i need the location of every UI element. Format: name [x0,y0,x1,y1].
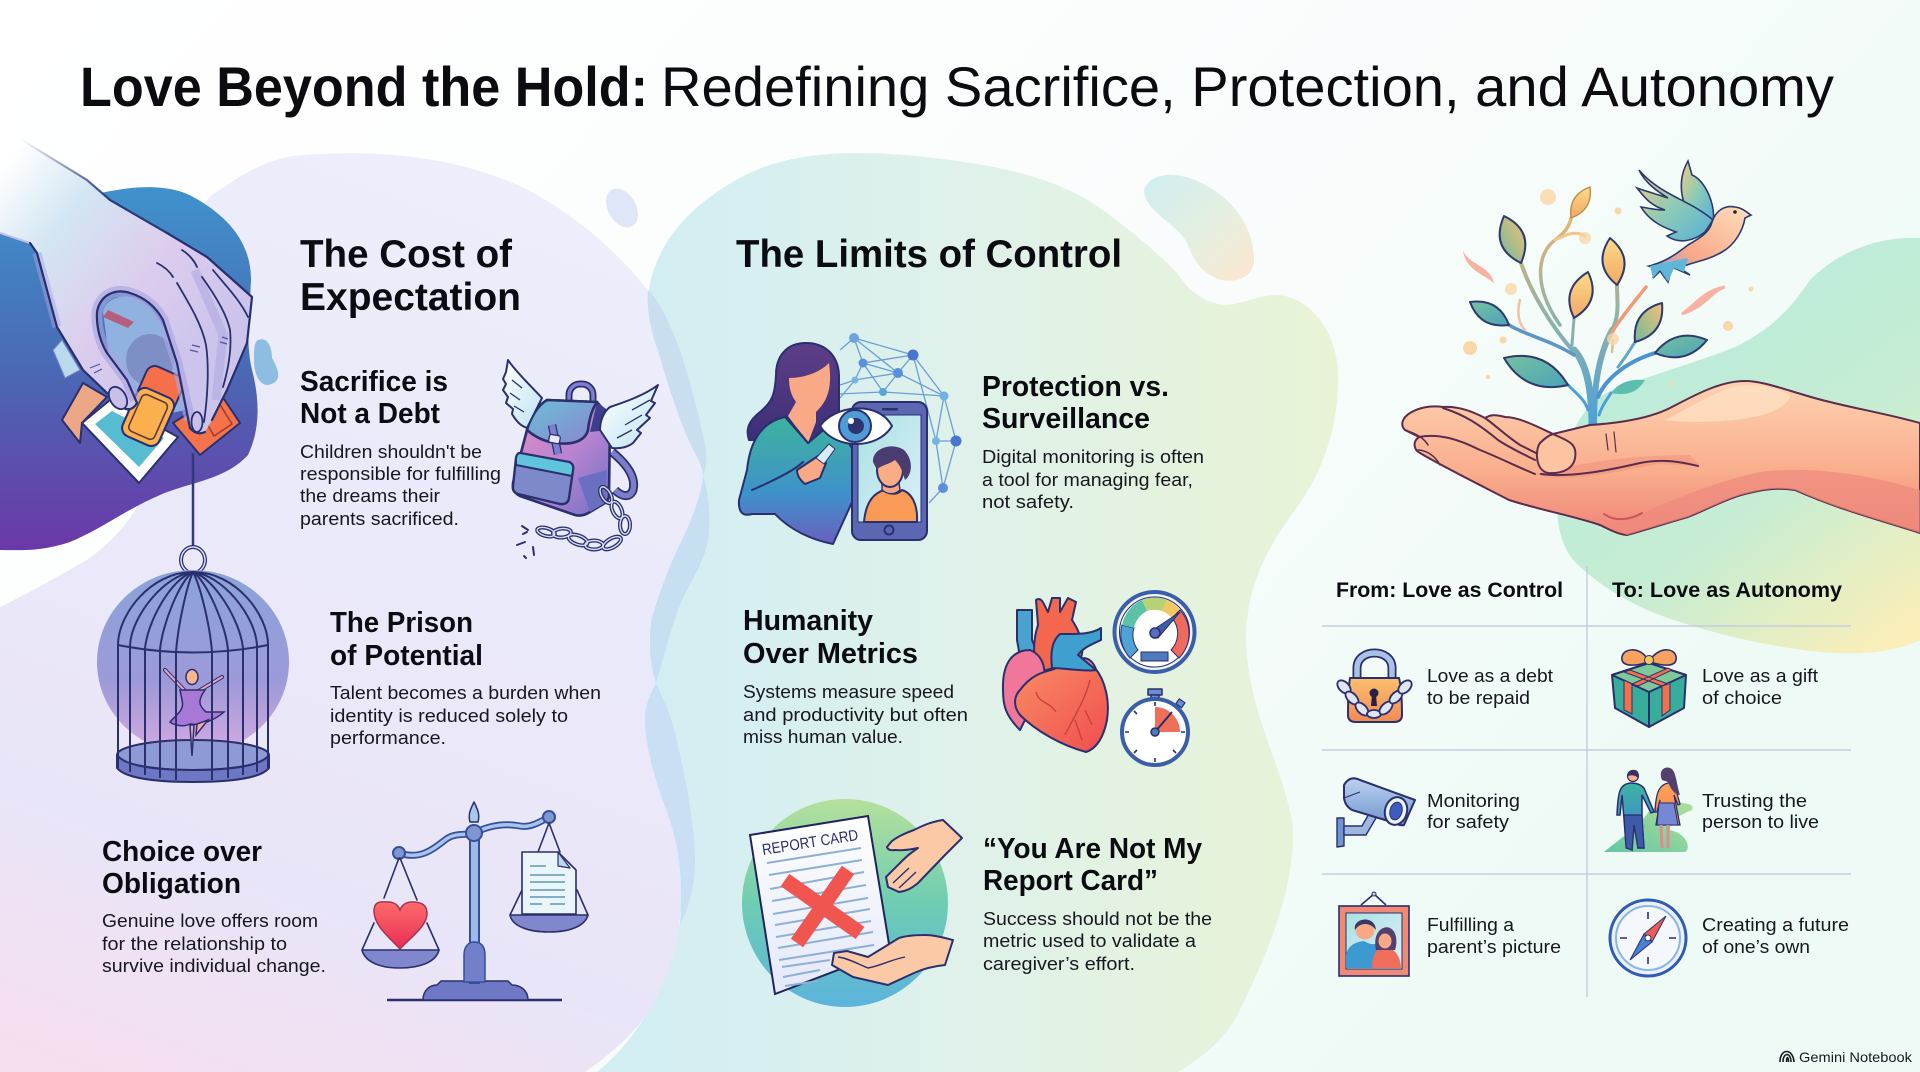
text: fulfilling a parent's picture: Fulfilling a [1427,914,1515,935]
icon: winged backpack with broken chain [503,360,658,558]
title: Redefining Sacrifice, Protection, and Autonomy [661,55,1834,118]
icon: small blue drop [254,339,278,385]
block: the prison of potential: of Potential [330,640,483,672]
icon: mother watching child through phone [739,333,962,544]
icon: couple walking on a path [1604,768,1693,852]
title: Love Beyond the Hold: [80,55,648,118]
icon: dove [1637,161,1751,282]
block: the prison of potential [330,607,601,748]
footer: gemini notebook mark: Gemini Notebook [1799,1049,1913,1065]
block: you are not my report card: Success should not be the [983,908,1212,929]
icon: framed family portrait [1339,892,1409,976]
block: sacrifice is not a debt: Sacrifice is [300,366,448,398]
panel: comparison table from control to autonomy [1322,566,1851,997]
block: humanity over metrics: miss human value. [743,726,903,747]
block: you are not my report card: Report Card” [983,865,1158,897]
illustration: hand holding a sprouting plant with a dove [1402,161,1920,535]
block: protection vs. surveillance [982,371,1204,512]
text: trusting the person to live [1702,790,1819,832]
icon: report card with red cross and hands [742,799,962,1007]
floating specks [1463,189,1754,386]
block: humanity over metrics: Over Metrics [743,638,918,670]
column header: from love as control: From: Love as Control [1336,579,1563,602]
icon: balance scale with heart and document [362,802,588,1000]
heading: the limits of control: The Limits of Control [736,233,1122,276]
icon: compass [1610,900,1686,976]
block: humanity over metrics: Humanity [743,605,873,637]
block: the prison of potential: Talent becomes a burden when [330,682,601,703]
background blob: right teal-yellow panel [1557,238,1920,653]
block: humanity over metrics: and productivity but often [743,704,968,725]
icon: hand gripping keepsakes on a dark blob [0,120,258,550]
block: protection vs. surveillance: Protection vs. [982,371,1169,403]
plant stems [1509,218,1655,426]
text: love as a gift: of choice [1702,687,1782,708]
block: sacrifice is not a debt: the dreams their [300,485,440,506]
icon: gift box [1612,650,1686,727]
text: love as a gift: Love as a gift [1702,665,1818,686]
block: choice over obligation: Choice over [102,836,262,868]
text: love as a gift [1702,665,1818,708]
block: protection vs. surveillance: Digital monitoring is often [982,446,1204,467]
heading: the cost of expectation [300,233,521,319]
block: sacrifice is not a debt: parents sacrificed. [300,508,459,529]
icon: security camera [1337,778,1415,847]
heading: the cost of expectation: Expectation [300,276,521,319]
block: you are not my report card: metric used to validate a [983,930,1197,951]
text: monitoring for safety: for safety [1427,811,1510,832]
title [80,55,1834,118]
background blob: left lavender panel [0,153,703,1072]
block: choice over obligation: for the relationship to [102,933,287,954]
text: love as a debt: to be repaid [1427,687,1530,708]
block: protection vs. surveillance: not safety. [982,491,1074,512]
block: choice over obligation: Genuine love offers room [102,910,318,931]
block: protection vs. surveillance: Surveillance [982,403,1150,435]
block: sacrifice is not a debt: Not a Debt [300,398,441,430]
column header: to love as autonomy: To: Love as Autonomy [1612,579,1842,602]
text: fulfilling a parent's picture: parent’s picture [1427,936,1561,957]
background blob: small teal-peach drop [1144,175,1254,281]
text: creating a future of one's own: Creating a future [1702,914,1849,935]
block: choice over obligation: survive individual change. [102,955,326,976]
heading: the cost of expectation: The Cost of [300,233,513,276]
text: trusting the person to live: Trusting the [1702,790,1807,811]
background blob: overlap lens upper [648,290,706,476]
text: fulfilling a parent's picture [1427,914,1561,957]
block: you are not my report card [983,833,1212,974]
block: choice over obligation [102,836,326,976]
panel: the cost of expectation [0,120,658,1000]
icon: speed gauge [1114,592,1194,672]
background blob: overlap lens middle [650,476,709,683]
icon: string and ring [181,453,205,573]
background blob: overlap lens lower [645,683,695,925]
ballerina [165,670,224,756]
icon: open hand [1402,381,1920,535]
text: creating a future of one's own: of one’s own [1702,936,1810,957]
icon: chained padlock [1335,653,1414,722]
icon: birdcage with ballerina [97,570,289,782]
text: love as a debt [1427,665,1553,708]
icon: stopwatch [1122,689,1188,765]
block: humanity over metrics: Systems measure speed [743,681,954,702]
block: choice over obligation: Obligation [102,868,241,900]
block: the prison of potential: identity is reduced solely to [330,705,568,726]
block: the prison of potential: The Prison [330,607,473,639]
block: sacrifice is not a debt: responsible for fulfilling [300,463,501,484]
block: protection vs. surveillance: a tool for managing fear, [982,469,1193,490]
text: creating a future of one's own [1702,914,1849,957]
panel: the limits of control [736,233,1212,1007]
text: love as a debt: Love as a debt [1427,665,1553,686]
block: you are not my report card: “You Are Not My [983,833,1202,865]
block: the prison of potential: performance. [330,727,446,748]
text: trusting the person to live: person to live [1702,811,1819,832]
background blob: small lavender drop [599,183,645,233]
background blob: central teal-green panel [597,153,1338,1072]
text: monitoring for safety: Monitoring [1427,790,1520,811]
plant leaves [1470,187,1707,394]
block: you are not my report card: caregiver’s effort. [983,953,1135,974]
block: sacrifice is not a debt [300,366,501,529]
block: humanity over metrics [743,605,968,747]
icon: report card with red cross and hands: REPORT CARD [761,827,859,859]
block: sacrifice is not a debt: Children shouldn't be [300,441,482,462]
icon: anatomical heart [1003,598,1108,752]
text: monitoring for safety [1427,790,1520,832]
